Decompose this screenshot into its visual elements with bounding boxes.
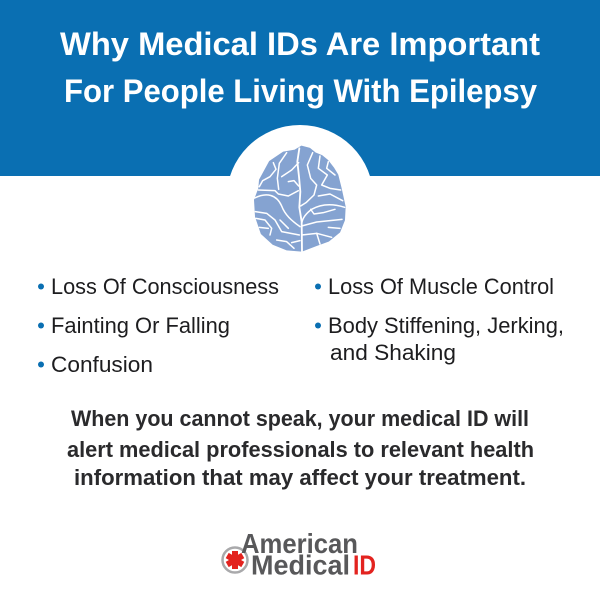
bullet: body stiffening: and Shaking [330, 340, 456, 365]
bullet: confusion: Confusion [51, 352, 153, 377]
header banner [0, 0, 600, 272]
title: For People Living With Epilepsy [64, 73, 537, 109]
list: right symptoms [315, 274, 564, 365]
bullet: body stiffening [315, 313, 564, 365]
closing statement: When you cannot speak, your medical ID will [71, 406, 529, 431]
bullet: fainting or falling: Fainting Or Falling [51, 313, 230, 338]
icon: brain [255, 147, 345, 251]
bullet: body stiffening: Body Stiffening, Jerking, [328, 313, 564, 338]
logo wordmark: American [241, 528, 358, 559]
list: left symptoms [38, 274, 279, 377]
closing statement: alert medical professionals to relevant health [67, 437, 534, 462]
title: Why Medical IDs Are Important [60, 26, 540, 62]
title [60, 26, 540, 109]
logo icon [222, 548, 248, 572]
bullet: loss of consciousness: Loss Of Consciousness [51, 274, 279, 299]
logo wordmark [241, 528, 376, 580]
logo wordmark: ID [353, 550, 376, 580]
logo wordmark: Medical [251, 550, 350, 580]
closing statement: information that may affect your treatment. [74, 465, 526, 490]
logo: American Medical ID [222, 528, 376, 580]
closing statement [67, 406, 534, 490]
bullet: loss of muscle control: Loss Of Muscle Control [328, 274, 554, 299]
